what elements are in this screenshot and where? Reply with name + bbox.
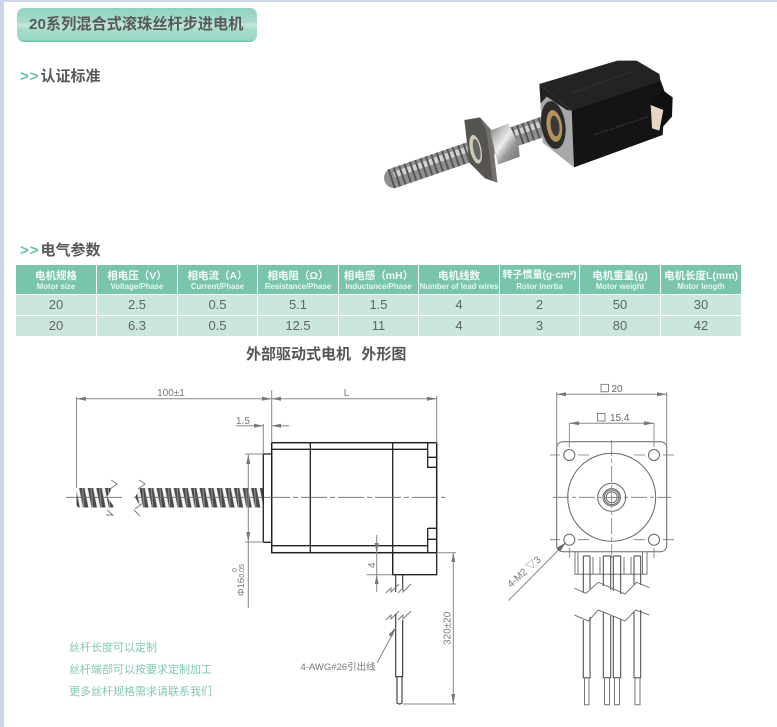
heading: electrical parameters: >>电气参数 [20,242,101,259]
dimension: 100±1: 100±1 [157,388,185,399]
table: electrical parameters: 相电感（mH） [344,270,413,282]
table: electrical parameters: 6.3 [128,318,146,333]
table: electrical parameters: 3 [536,318,543,333]
table: electrical parameters: Number of lead wires [420,282,498,291]
table: electrical parameters: 转子惯量(g·cm²) [503,270,576,281]
table: electrical parameters: 相电流（A） [187,270,248,282]
title banner [17,8,257,42]
drawing heading: 外部驱动式电机 外形图 [246,346,406,363]
page edge band [0,0,777,2]
note: screw end: 丝杆端部可以按要求定制加工 [69,664,212,676]
table: electrical parameters: Motor length [677,282,725,291]
table: electrical parameters: 4 [455,318,463,333]
table: electrical parameters [16,265,741,336]
row 1 [16,295,96,315]
table: electrical parameters: 30 [694,297,708,312]
side view: motor body [263,443,445,575]
dimension: 100±1 [76,388,272,488]
row 2 [16,316,96,336]
table: electrical parameters: Voltage/Phase [111,282,163,291]
connector [651,91,673,131]
dimension: square 15.4 [569,413,654,425]
note: contact: 更多丝杆规格需求请联系我们 [69,686,212,698]
dimension: 320±20 [403,553,456,704]
dimension: shaft diameter: 0 [232,568,239,572]
side view: lead wire [386,575,411,704]
dimension: 320±20: 320±20 [442,611,454,645]
table: electrical parameters: 2.5 [128,297,146,312]
header: motor size: Motor size [37,282,75,291]
dimension: square 20: 20 [612,384,623,395]
dimension: square 20 [557,384,667,447]
screw shaft [391,119,557,179]
mounting hole callout: 4-M2 ▽3 [506,554,544,590]
title banner: 20系列混合式滚珠丝杆步进电机 [29,16,243,33]
table: electrical parameters: 电机长度L(mm) [664,270,738,282]
table: electrical parameters: 2 [536,297,543,312]
front view: connector and wires [574,552,649,705]
table: electrical parameters: 1.5 [369,297,388,312]
table: electrical parameters: Inductance/Phase [345,282,412,291]
dimension: L [272,388,437,443]
row 1: 20 [49,297,63,312]
table: electrical parameters: 相电阻（Ω） [268,270,328,282]
row 2: 20 [49,318,63,333]
ball nut [490,124,520,165]
mounting hole callout [506,542,566,601]
table: electrical parameters: 4 [455,297,463,312]
table: electrical parameters: 电机重量(g) [592,270,648,282]
table: electrical parameters: 5.1 [289,297,307,312]
table: electrical parameters: 11 [372,318,385,333]
table: electrical parameters: Resistance/Phase [265,282,331,291]
note: screw length: 丝杆长度可以定制 [69,642,157,654]
table: electrical parameters: 电机线数 [438,270,480,282]
table: electrical parameters: 50 [613,297,627,312]
product photo: stepper motor with ball screw [384,60,673,188]
header: motor size: 电机规格 [35,270,77,282]
dimension: shaft diameter: -0.05 [239,564,246,580]
table: electrical parameters: Rotor inertia [516,282,563,291]
flange [464,117,497,183]
motor front plate [539,84,574,167]
header: motor size [16,265,96,294]
dimension: 4 [367,535,393,592]
dimension: 4: 4 [367,562,378,568]
dimension: square 15.4: 15.4 [610,413,630,424]
dimension: 1.5 [236,416,289,454]
table: electrical parameters: 相电压（V） [107,270,167,282]
table: electrical parameters: 42 [694,318,708,333]
dimension: L: L [344,388,350,399]
table: electrical parameters: Motor weight [596,282,644,291]
table: electrical parameters: 0.5 [208,318,227,333]
dimension: shaft diameter: Φ16 [236,578,247,596]
table: electrical parameters: Current/Phase [191,282,244,291]
wire callout: 4-AWG#26引出线 [300,661,376,673]
motor black body [539,61,661,111]
table: electrical parameters: 80 [613,318,627,333]
table: electrical parameters: 12.5 [285,318,311,333]
side view: screw [66,480,264,516]
dimension: 1.5: 1.5 [236,416,250,427]
heading: certification: >>认证标准 [20,68,101,85]
front view: motor face [550,423,674,558]
table: electrical parameters: 0.5 [208,297,227,312]
wire callout [300,627,396,673]
dimension: shaft diameter [232,454,263,608]
